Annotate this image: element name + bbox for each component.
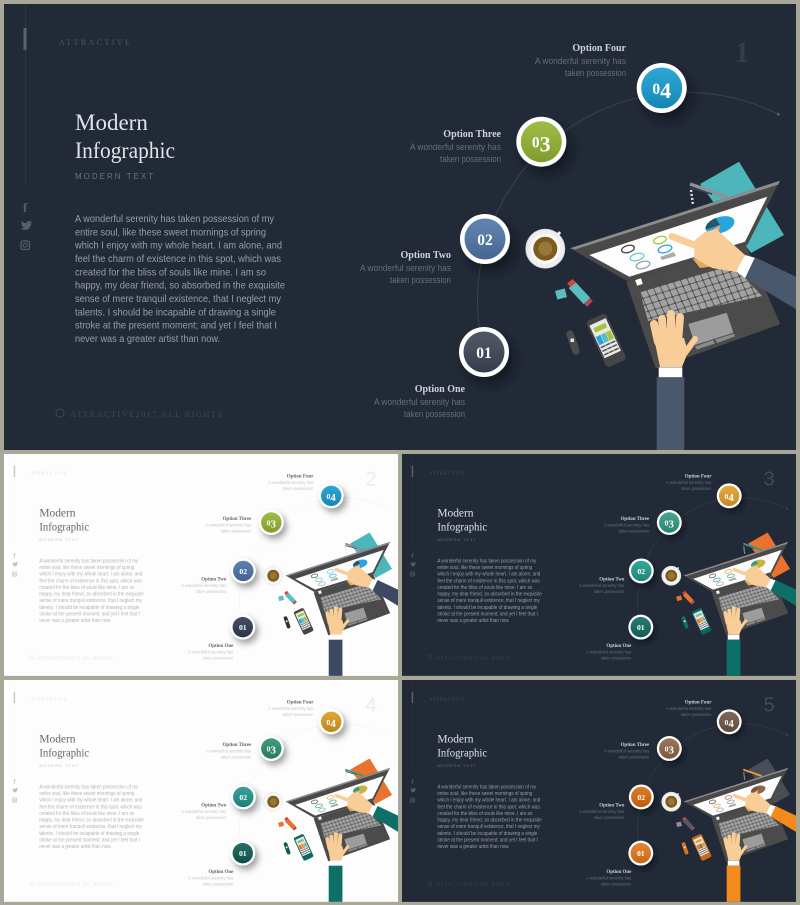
- option three: A wonderful serenity has: [410, 142, 501, 152]
- option two: Option Two: [401, 250, 451, 261]
- option four: Option Four: [685, 700, 712, 705]
- option two: [579, 803, 625, 820]
- badge 02: 02: [239, 567, 247, 576]
- body text: [39, 784, 144, 850]
- body text: sense of mere tranquil existence, that I neglect my: [437, 824, 540, 830]
- option two: A wonderful serenity has: [181, 583, 227, 588]
- illustration: laptop and desk: [264, 532, 398, 676]
- title: Infographic: [39, 748, 89, 760]
- brand marker: [412, 680, 413, 770]
- option three: A wonderful serenity has: [206, 749, 252, 754]
- option two: taken possession: [196, 589, 227, 594]
- badge 04: [717, 483, 742, 508]
- brand name: ATTRACTIVE: [429, 470, 466, 475]
- option three: [410, 129, 502, 164]
- option three: taken possession: [221, 755, 252, 760]
- body text: sense of mere tranquil existence, that I neglect my: [437, 598, 540, 604]
- option one: Option One: [606, 644, 632, 649]
- body text: created for the bliss of souls like mine. I am so: [437, 585, 533, 591]
- slide 2: light blue-green variant: [4, 454, 398, 676]
- option three: taken possession: [440, 154, 501, 164]
- title: Modern: [75, 110, 148, 135]
- social icons: [20, 200, 32, 250]
- option three: Option Three: [621, 517, 650, 522]
- body text: sense of mere tranquil existence, that I neglect my: [75, 294, 282, 305]
- title: Infographic: [75, 138, 175, 163]
- option four: A wonderful serenity has: [268, 480, 314, 485]
- brand marker: [412, 454, 413, 544]
- option one: [586, 644, 632, 660]
- title: Infographic: [437, 748, 487, 760]
- badge 02: 02: [637, 567, 645, 576]
- slide number: 5: [764, 694, 775, 716]
- copyright: ATTRACTIVE2017.ALL RIGHTS: [70, 409, 222, 419]
- illustration: laptop and desk: [264, 758, 398, 902]
- body text: [39, 558, 144, 624]
- option four: Option Four: [287, 700, 314, 705]
- body text: [437, 784, 542, 850]
- option two: [181, 803, 227, 820]
- badge 03: 0: [665, 518, 668, 527]
- body text: stroke at the present moment; and yet I feel that I: [437, 611, 538, 617]
- title: Infographic: [437, 522, 487, 534]
- option two: Option Two: [201, 803, 227, 808]
- body text: A wonderful serenity has taken possession of my: [75, 214, 275, 225]
- option one: A wonderful serenity has: [188, 875, 234, 880]
- body text: which I enjoy with my whole heart. I am alone, and: [437, 572, 540, 578]
- body text: [74, 214, 285, 345]
- badge 04: 4: [728, 718, 734, 730]
- option three: taken possession: [619, 529, 650, 534]
- body text: created for the bliss of souls like mine. I am so: [437, 811, 533, 817]
- social icons: [12, 778, 18, 802]
- body text: stroke at the present moment; and yet I feel that I: [39, 611, 140, 617]
- brand name: ATTRACTIVE: [31, 696, 68, 701]
- body text: entire soul, like these sweet mornings of spring: [437, 565, 532, 571]
- badge 04: 0: [725, 492, 728, 501]
- badge 04: [637, 63, 687, 113]
- badge 04: [319, 709, 344, 734]
- body text: entire soul, like these sweet mornings of spring: [75, 227, 266, 238]
- option two: taken possession: [594, 815, 625, 820]
- title: [39, 508, 89, 534]
- slide background: [402, 680, 796, 902]
- option three: A wonderful serenity has: [206, 523, 252, 528]
- body text: talents. I should be incapable of drawing a single: [437, 605, 537, 611]
- option one: A wonderful serenity has: [374, 397, 465, 407]
- badge 02: 02: [477, 232, 493, 249]
- brand marker: [24, 4, 26, 185]
- option four: [535, 43, 627, 78]
- copyright: ATTRACTIVE2017.ALL RIGHTS: [435, 881, 511, 886]
- badge 02: 02: [637, 793, 645, 802]
- badge 04: 0: [725, 718, 728, 727]
- body text: sense of mere tranquil existence, that I neglect my: [39, 598, 142, 604]
- illustration: laptop and desk: [526, 162, 796, 450]
- body text: never was a greater artist than now.: [437, 618, 509, 624]
- slide background: [4, 680, 398, 902]
- body text: never was a greater artist than now.: [39, 618, 111, 624]
- body text: entire soul, like these sweet mornings of spring: [39, 565, 134, 571]
- option two: A wonderful serenity has: [579, 583, 625, 588]
- brand marker: [14, 680, 15, 770]
- connecting arc: [638, 724, 788, 853]
- option two: taken possession: [196, 815, 227, 820]
- option two: [579, 577, 625, 594]
- title: Infographic: [39, 522, 89, 534]
- badge 02: [231, 784, 256, 809]
- body text: never was a greater artist than now.: [75, 334, 220, 345]
- badge 04: 0: [327, 718, 330, 727]
- social icons: [410, 552, 416, 576]
- subtitle: MODERN TEXT: [437, 763, 477, 768]
- brand name: ATTRACTIVE: [59, 38, 132, 47]
- connecting arc: [240, 498, 389, 627]
- option three: [604, 743, 650, 760]
- body text: talents. I should be incapable of drawing a single: [437, 831, 537, 837]
- badge 01: 01: [239, 623, 247, 632]
- option three: taken possession: [221, 529, 252, 534]
- badge 01: 01: [239, 849, 247, 858]
- body text: created for the bliss of souls like mine. I am so: [75, 267, 266, 278]
- slide background: [4, 454, 398, 676]
- badge 02: [629, 558, 654, 583]
- body text: talents. I should be incapable of drawing a single: [39, 831, 139, 837]
- subtitle: MODERN TEXT: [39, 763, 79, 768]
- subtitle: MODERN TEXT: [75, 172, 155, 181]
- body text: happy, my dear friend, so absorbed in the exquisite: [75, 281, 285, 292]
- option three: A wonderful serenity has: [604, 749, 650, 754]
- body text: feel the charm of existence in this spot, which was: [39, 578, 142, 584]
- badge 03: 3: [270, 518, 276, 530]
- option three: [604, 517, 650, 534]
- body text: which I enjoy with my whole heart. I am alone, and: [437, 798, 540, 804]
- title: [437, 734, 487, 760]
- slide 4: light teal-orange variant: [4, 680, 398, 902]
- option one: taken possession: [601, 655, 632, 660]
- badge 03: [657, 736, 682, 761]
- slide number: 4: [366, 694, 377, 716]
- option three: Option Three: [223, 743, 252, 748]
- option four: Option Four: [685, 474, 712, 479]
- body text: never was a greater artist than now.: [437, 844, 509, 850]
- badge 03: [259, 510, 284, 535]
- option two: Option Two: [599, 803, 625, 808]
- option two: taken possession: [390, 275, 451, 285]
- brand marker: [14, 454, 15, 544]
- body text: happy, my dear friend, so absorbed in the exquisite: [437, 818, 542, 824]
- option three: [206, 743, 252, 760]
- copyright: ATTRACTIVE2017.ALL RIGHTS: [435, 655, 511, 660]
- body text: feel the charm of existence in this spot, which was: [39, 804, 142, 810]
- body text: sense of mere tranquil existence, that I neglect my: [39, 824, 142, 830]
- badge 03: [259, 736, 284, 761]
- option two: A wonderful serenity has: [181, 809, 227, 814]
- option four: Option Four: [287, 474, 314, 479]
- option four: [666, 700, 712, 717]
- body text: never was a greater artist than now.: [39, 844, 111, 850]
- badge 03: 0: [267, 518, 270, 527]
- body text: A wonderful serenity has taken possession of my: [39, 784, 139, 790]
- body text: A wonderful serenity has taken possession of my: [437, 784, 537, 790]
- option two: [181, 577, 227, 594]
- body text: [437, 558, 542, 624]
- title: Modern: [39, 508, 76, 520]
- badge 04: 0: [652, 81, 660, 98]
- option four: taken possession: [283, 712, 314, 717]
- option one: A wonderful serenity has: [586, 875, 632, 880]
- social icons: [410, 778, 416, 802]
- option three: A wonderful serenity has: [604, 523, 650, 528]
- option one: [188, 644, 234, 660]
- badge 03: [657, 510, 682, 535]
- badge 03: 0: [267, 744, 270, 753]
- option one: [374, 384, 466, 419]
- badge 02: [629, 784, 654, 809]
- badge 01: [628, 615, 653, 640]
- badge 02: 02: [239, 793, 247, 802]
- option four: taken possession: [681, 486, 712, 491]
- title: [39, 734, 89, 760]
- slide 5: dark orange-brown variant: [402, 680, 796, 902]
- body text: feel the charm of existence in this spot, which was: [437, 578, 540, 584]
- slide background: [4, 4, 796, 450]
- title: [75, 110, 175, 163]
- body text: happy, my dear friend, so absorbed in the exquisite: [437, 592, 542, 598]
- body text: A wonderful serenity has taken possession of my: [437, 558, 537, 564]
- option one: Option One: [208, 644, 234, 649]
- illustration: laptop and desk: [662, 532, 796, 676]
- badge 04: 0: [327, 492, 330, 501]
- badge 01: [628, 841, 653, 866]
- badge 04: [717, 709, 742, 734]
- option one: Option One: [606, 870, 632, 875]
- badge 01: 01: [637, 623, 645, 632]
- body text: talents. I should be incapable of drawing a single: [39, 605, 139, 611]
- slide number: 2: [366, 468, 377, 490]
- badge 03: 3: [668, 744, 674, 756]
- option four: [268, 700, 314, 717]
- option four: [268, 474, 314, 491]
- badge 03: 3: [540, 132, 551, 157]
- badge 04: 4: [660, 78, 671, 103]
- badge 04: 4: [728, 492, 734, 504]
- option one: A wonderful serenity has: [188, 649, 234, 654]
- option two: A wonderful serenity has: [579, 809, 625, 814]
- connecting arc: [240, 724, 389, 853]
- body text: stroke at the present moment; and yet I feel that I: [75, 321, 277, 332]
- social icons: [12, 552, 18, 576]
- option three: Option Three: [223, 517, 252, 522]
- option one: taken possession: [203, 881, 234, 886]
- option two: A wonderful serenity has: [360, 263, 451, 273]
- badge 04: 4: [330, 718, 336, 730]
- body text: which I enjoy with my whole heart. I am alone, and: [39, 798, 142, 804]
- option four: [666, 474, 712, 491]
- option two: [360, 250, 451, 285]
- body text: entire soul, like these sweet mornings of spring: [437, 791, 532, 797]
- body text: stroke at the present moment; and yet I feel that I: [39, 837, 140, 843]
- slide 3: dark teal-orange variant: [402, 454, 796, 676]
- connecting arc: [477, 92, 780, 352]
- option two: taken possession: [594, 589, 625, 594]
- body text: happy, my dear friend, so absorbed in the exquisite: [39, 818, 144, 824]
- title: [437, 508, 487, 534]
- option one: taken possession: [601, 881, 632, 886]
- title: Modern: [39, 734, 76, 746]
- copyright: ATTRACTIVE2017.ALL RIGHTS: [37, 655, 113, 660]
- brand name: ATTRACTIVE: [429, 696, 466, 701]
- option four: A wonderful serenity has: [666, 706, 712, 711]
- option one: [586, 870, 632, 886]
- option four: A wonderful serenity has: [268, 706, 314, 711]
- body text: happy, my dear friend, so absorbed in the exquisite: [39, 592, 144, 598]
- badge 01: 01: [476, 345, 492, 362]
- badge 01: 01: [637, 849, 645, 858]
- body text: created for the bliss of souls like mine. I am so: [39, 811, 135, 817]
- badge 04: [319, 483, 344, 508]
- option one: Option One: [415, 384, 466, 395]
- body text: feel the charm of existence in this spot, which was: [437, 804, 540, 810]
- body text: stroke at the present moment; and yet I feel that I: [437, 837, 538, 843]
- slide background: [402, 454, 796, 676]
- option four: taken possession: [283, 486, 314, 491]
- badge 01: [459, 327, 509, 377]
- body text: created for the bliss of souls like mine. I am so: [39, 585, 135, 591]
- illustration: laptop and desk: [662, 758, 796, 902]
- slide 1: large dark layout: [4, 4, 796, 450]
- body text: talents. I should be incapable of drawing a single: [75, 307, 276, 318]
- option four: taken possession: [565, 68, 626, 78]
- slide number: 1: [734, 36, 750, 69]
- option one: Option One: [208, 870, 234, 875]
- badge 02: [231, 558, 256, 583]
- title: Modern: [437, 734, 474, 746]
- option three: [206, 517, 252, 534]
- option two: Option Two: [201, 577, 227, 582]
- option three: Option Three: [443, 129, 502, 140]
- option three: Option Three: [621, 743, 650, 748]
- option one: [188, 870, 234, 886]
- option two: Option Two: [599, 577, 625, 582]
- option four: A wonderful serenity has: [666, 480, 712, 485]
- option one: A wonderful serenity has: [586, 649, 632, 654]
- badge 01: [230, 615, 255, 640]
- body text: feel the charm of existence in this spot, which was: [75, 254, 281, 265]
- badge 03: 3: [270, 744, 276, 756]
- body text: which I enjoy with my whole heart. I am alone, and: [39, 572, 142, 578]
- badge 03: 3: [668, 518, 674, 530]
- body text: A wonderful serenity has taken possession of my: [39, 558, 139, 564]
- badge 03: [516, 117, 566, 167]
- badge 03: 0: [532, 135, 540, 152]
- brand name: ATTRACTIVE: [31, 470, 68, 475]
- option four: A wonderful serenity has: [535, 56, 626, 66]
- badge 04: 4: [330, 492, 336, 504]
- subtitle: MODERN TEXT: [437, 537, 477, 542]
- copyright: ATTRACTIVE2017.ALL RIGHTS: [37, 881, 113, 886]
- subtitle: MODERN TEXT: [39, 537, 79, 542]
- option one: taken possession: [203, 655, 234, 660]
- title: Modern: [437, 508, 474, 520]
- body text: which I enjoy with my whole heart. I am alone, and: [74, 241, 282, 252]
- slide number: 3: [764, 468, 775, 490]
- option three: taken possession: [619, 755, 650, 760]
- badge 02: [460, 214, 510, 264]
- option one: taken possession: [404, 409, 465, 419]
- option four: Option Four: [572, 43, 627, 54]
- badge 01: [230, 841, 255, 866]
- body text: entire soul, like these sweet mornings of spring: [39, 791, 134, 797]
- connecting arc: [638, 498, 788, 627]
- option four: taken possession: [681, 712, 712, 717]
- badge 03: 0: [665, 744, 668, 753]
